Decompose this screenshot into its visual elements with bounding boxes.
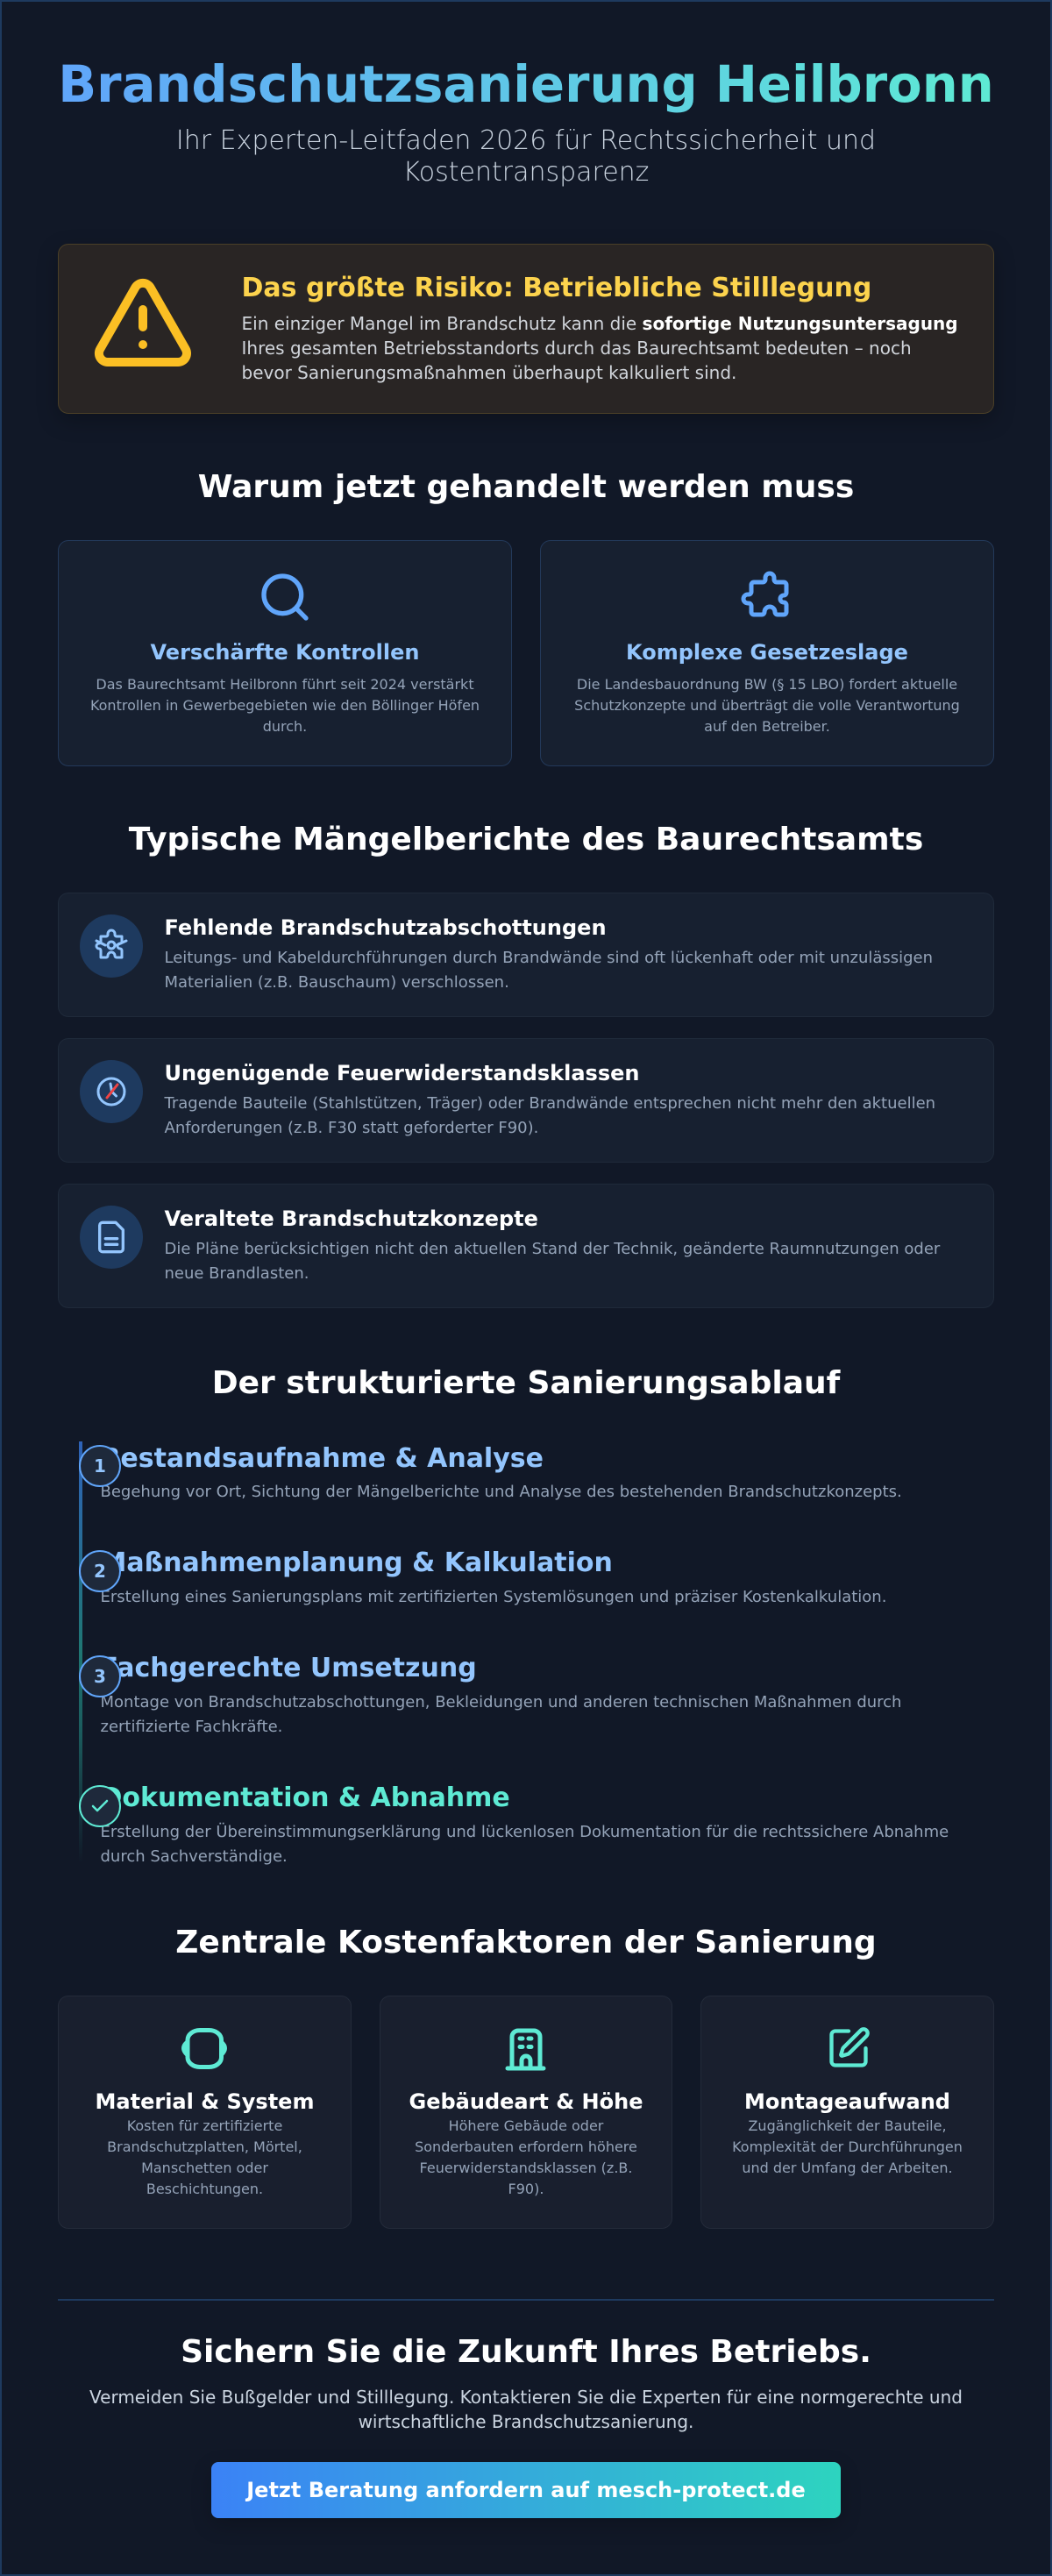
heading: process: Der strukturierte Sanierungsablauf bbox=[212, 1364, 840, 1401]
icon: pen bbox=[829, 2027, 870, 2067]
card text bbox=[574, 675, 960, 735]
icon: warning triangle bbox=[95, 279, 191, 366]
card heading: Komplexe Gesetzeslage bbox=[626, 640, 908, 665]
step 1 marker: 1 bbox=[94, 1455, 106, 1477]
step 2 marker bbox=[79, 1550, 121, 1592]
subtitle bbox=[176, 125, 876, 188]
icon: building bbox=[505, 2029, 545, 2071]
card text: durch. bbox=[263, 717, 307, 735]
defect 2 heading: Ungenügende Feuerwiderstandsklassen bbox=[165, 1061, 639, 1085]
icon: puzzle bbox=[742, 572, 789, 617]
card text: Sonderbauten erfordern höhere bbox=[415, 2138, 637, 2155]
button: Jetzt Beratung anfordern auf mesch-protect.de bbox=[246, 2478, 806, 2502]
step 4 heading: Dokumentation & Abnahme bbox=[100, 1783, 510, 1813]
step 2 marker: 2 bbox=[94, 1561, 106, 1582]
step 1 marker bbox=[79, 1445, 121, 1487]
defect 1 text bbox=[165, 949, 933, 991]
panel: installation bbox=[700, 1996, 994, 2229]
step 3 marker bbox=[79, 1655, 121, 1697]
step 3 heading: Fachgerechte Umsetzung bbox=[100, 1653, 477, 1683]
alert text: bevor Sanierungsmaßnahmen überhaupt kalkuliert sind. bbox=[242, 362, 736, 383]
panel: complex legislation bbox=[540, 540, 994, 766]
call to action text bbox=[89, 2387, 963, 2432]
call to action text: wirtschaftliche Brandschutzsanierung. bbox=[359, 2411, 693, 2432]
icon: material bbox=[181, 2028, 227, 2069]
defect 1 text: Leitungs- und Kabeldurchführungen durch Brandwände sind oft lückenhaft oder mit unzulässigen bbox=[165, 949, 933, 966]
step 4 text bbox=[100, 1822, 949, 1866]
card text: Feuerwiderstandsklassen (z.B. bbox=[420, 2159, 632, 2176]
step 4 marker bbox=[79, 1785, 121, 1827]
panel: material bbox=[58, 1996, 352, 2229]
step 2 text: Erstellung eines Sanierungsplans mit zertifizierten Systemlösungen und präziser Kostenkalkulation. bbox=[100, 1588, 886, 1606]
defect 3 text: Die Pläne berücksichtigen nicht den aktuellen Stand der Technik, geänderte Raumnutzungen oder bbox=[165, 1240, 940, 1257]
icon: missing firestop bbox=[80, 914, 143, 978]
card heading: Verschärfte Kontrollen bbox=[151, 640, 419, 665]
alert heading: Das größte Risiko: Betriebliche Stilllegung bbox=[242, 273, 871, 303]
heading: cost factors: Zentrale Kostenfaktoren der Sanierung bbox=[175, 1925, 877, 1960]
card heading: Gebäudeart & Höhe bbox=[409, 2089, 643, 2114]
defect 3 text bbox=[165, 1240, 940, 1282]
alert text: Ein einziger Mangel im Brandschutz kann die sofortige Nutzungsuntersagung bbox=[242, 313, 958, 334]
panel: defect 3 bbox=[58, 1184, 994, 1308]
card text: Brandschutzplatten, Mörtel, bbox=[107, 2138, 302, 2155]
card text: Manschetten oder bbox=[141, 2159, 268, 2176]
card text: Das Baurechtsamt Heilbronn führt seit 2024 verstärkt bbox=[96, 675, 474, 693]
defect 3 text: neue Brandlasten. bbox=[165, 1264, 309, 1282]
card text: F90). bbox=[508, 2180, 544, 2197]
step 1 text: Begehung vor Ort, Sichtung der Mängelberichte und Analyse des bestehenden Brandschutzkonzepts. bbox=[100, 1483, 902, 1501]
card text: und der Umfang der Arbeiten. bbox=[742, 2159, 953, 2176]
defect 1 heading: Fehlende Brandschutzabschottungen bbox=[165, 915, 607, 940]
panel: building bbox=[380, 1996, 672, 2229]
card heading: Material & System bbox=[96, 2089, 314, 2114]
icon: fire resistance clock bbox=[80, 1060, 143, 1123]
timeline bbox=[79, 1441, 82, 1847]
card text: Kosten für zertifizierte bbox=[127, 2117, 282, 2134]
card text bbox=[415, 2117, 637, 2197]
panel: defect 2 bbox=[58, 1038, 994, 1163]
panel: risk alert bbox=[58, 244, 994, 414]
defect 1 text: Materialien (z.B. Bauschaum) verschlossen. bbox=[165, 973, 509, 991]
step 3 text: Montage von Brandschutzabschottungen, Bekleidungen und anderen technischen Maßnahmen durch bbox=[100, 1693, 901, 1711]
button bbox=[211, 2462, 841, 2518]
subtitle: Kostentransparenz bbox=[403, 157, 649, 188]
timeline line bbox=[79, 1441, 82, 1863]
icon: magnifier bbox=[261, 573, 309, 621]
card text bbox=[90, 675, 480, 735]
card text: Die Landesbauordnung BW (§ 15 LBO) fordert aktuelle bbox=[577, 675, 957, 693]
card text: Komplexität der Durchführungen bbox=[732, 2138, 963, 2155]
heading: why act now: Warum jetzt gehandelt werden muss bbox=[198, 469, 854, 505]
defect 2 text bbox=[164, 1094, 935, 1136]
alert text bbox=[242, 313, 958, 383]
card text: Beschichtungen. bbox=[146, 2180, 263, 2197]
step 3 text: zertifizierte Fachkräfte. bbox=[100, 1718, 282, 1736]
card heading: Montageaufwand bbox=[744, 2089, 950, 2114]
defect 3 heading: Veraltete Brandschutzkonzepte bbox=[165, 1206, 538, 1231]
call to action text: Vermeiden Sie Bußgelder und Stilllegung. Kontaktieren Sie die Experten für eine normgerechte und bbox=[89, 2387, 963, 2408]
alert text: Ihres gesamten Betriebsstandorts durch das Baurechtsamt bedeuten – noch bbox=[242, 338, 912, 359]
title: Brandschutzsanierung Heilbronn bbox=[58, 55, 994, 114]
step 3 marker: 3 bbox=[94, 1666, 106, 1687]
step 3 text bbox=[100, 1693, 901, 1736]
defect 2 text: Anforderungen (z.B. F30 statt geforderter F90). bbox=[165, 1119, 538, 1136]
card text bbox=[107, 2117, 302, 2197]
step 4 text: Erstellung der Übereinstimmungserklärung und lückenlosen Dokumentation für die rechtssichere Abnahme bbox=[100, 1823, 949, 1841]
card text: Schutzkonzepte und überträgt die volle Verantwortung bbox=[574, 696, 960, 714]
defect 2 text: Tragende Bauteile (Stahlstützen, Träger) oder Brandwände entsprechen nicht mehr den aktuellen bbox=[165, 1094, 935, 1112]
step 1 heading: Bestandsaufnahme & Analyse bbox=[100, 1443, 544, 1473]
divider bbox=[58, 2299, 994, 2301]
card text: auf den Betreiber. bbox=[704, 717, 830, 735]
panel: stricter inspections bbox=[58, 540, 512, 766]
panel: defect 1 bbox=[58, 893, 994, 1017]
card text: Höhere Gebäude oder bbox=[449, 2117, 603, 2134]
heading: typical defects: Typische Mängelberichte des Baurechtsamts bbox=[129, 822, 923, 857]
card text: Kontrollen in Gewerbegebieten wie den Böllinger Höfen bbox=[90, 696, 480, 714]
step 2 heading: Maßnahmenplanung & Kalkulation bbox=[100, 1548, 613, 1578]
step 4 text: durch Sachverständige. bbox=[100, 1847, 288, 1866]
subtitle: Ihr Experten-Leitfaden 2026 für Rechtssicherheit und bbox=[176, 125, 876, 156]
card text: Zugänglichkeit der Bauteile, bbox=[748, 2117, 947, 2134]
call to action heading: Sichern Sie die Zukunft Ihres Betriebs. bbox=[181, 2334, 871, 2370]
card text bbox=[732, 2117, 963, 2176]
icon: document bbox=[80, 1206, 143, 1269]
